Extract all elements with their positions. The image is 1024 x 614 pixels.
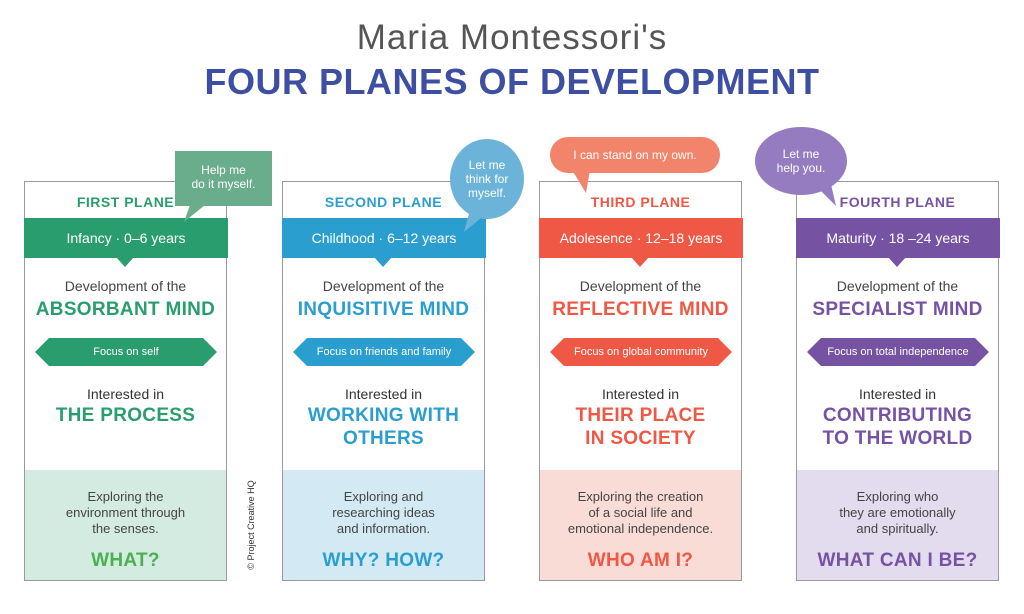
bubble text: fourth: Let me: [783, 147, 819, 161]
bubble text: third: I can stand on my own.: [573, 148, 697, 162]
bubble text: first: Help me: [201, 163, 246, 177]
focus arrow: Focus on self: [93, 346, 159, 358]
bottom box: [797, 470, 998, 580]
bubble: third: [550, 137, 720, 193]
bottom box: [540, 470, 741, 580]
bubble text: second: think for: [466, 172, 508, 186]
interest text: Interested in: [602, 386, 679, 402]
panel: first plane: [24, 181, 227, 581]
interest heading: [822, 405, 972, 449]
bottom box: emotional independence.: [568, 521, 713, 536]
bottom box: and information.: [337, 521, 430, 536]
interest heading: IN SOCIETY: [585, 428, 696, 449]
mind heading: SPECIALIST MIND: [812, 299, 983, 320]
bottom box: Exploring the creation: [578, 489, 703, 504]
interest heading: THEIR PLACE: [576, 405, 705, 426]
mind heading: ABSORBANT MIND: [36, 299, 215, 320]
development text: Development of the: [323, 278, 444, 294]
plane label: FOURTH PLANE: [840, 194, 955, 210]
interest text: Interested in: [345, 386, 422, 402]
focus arrow: [807, 338, 989, 366]
development text: Development of the: [580, 278, 701, 294]
development text: Development of the: [65, 278, 186, 294]
focus arrow: Focus on friends and family: [317, 346, 451, 358]
focus arrow: [550, 338, 732, 366]
speech bubbles: [175, 127, 847, 232]
interest heading: THE PROCESS: [56, 405, 195, 426]
bottom box: [25, 470, 226, 580]
bottom box: the senses.: [92, 521, 159, 536]
bottom box: Exploring and: [344, 489, 423, 504]
bottom box: they are emotionally: [839, 505, 956, 520]
credit: © Project Creative HQ: [246, 480, 256, 570]
panel: fourth plane: [796, 181, 999, 581]
mind heading: INQUISITIVE MIND: [298, 299, 469, 320]
title: FOUR PLANES OF DEVELOPMENT: [204, 61, 820, 102]
bottom box: [283, 470, 484, 580]
bottom box: WHAT CAN I BE?: [817, 550, 978, 571]
mind heading: REFLECTIVE MIND: [552, 299, 729, 320]
panel: third plane: [539, 181, 742, 581]
plane label: FIRST PLANE: [77, 194, 174, 210]
focus arrow: Focus on global community: [574, 346, 708, 358]
bottom box: of a social life and: [588, 505, 693, 520]
bottom box: WHO AM I?: [588, 550, 693, 571]
bottom box: Exploring the: [88, 489, 163, 504]
age band: [24, 218, 228, 258]
bubble: fourth: [755, 127, 847, 206]
bottom box: WHAT?: [91, 550, 160, 571]
age band: Maturity · 18 –24 years: [826, 230, 970, 246]
age band: Childhood · 6–12 years: [312, 230, 456, 246]
age band: [282, 218, 486, 258]
development text: Development of the: [837, 278, 958, 294]
age band: Infancy · 0–6 years: [66, 230, 186, 246]
interest heading: CONTRIBUTING: [823, 405, 972, 426]
interest heading: TO THE WORLD: [823, 428, 972, 449]
bubble text: second: Let me: [469, 158, 505, 172]
bubble: first: [175, 151, 272, 222]
title: Maria Montessori's: [357, 18, 667, 57]
bubble text: fourth: help you.: [777, 161, 825, 175]
interest heading: [308, 405, 459, 449]
panel: second plane: [282, 181, 485, 581]
interest heading: OTHERS: [343, 428, 424, 449]
bubble text: second: myself.: [468, 186, 506, 200]
interest text: Interested in: [859, 386, 936, 402]
bottom box: environment through: [66, 505, 185, 520]
bubble text: fourth: [777, 147, 825, 175]
title: [204, 18, 820, 102]
bubble: second: [450, 139, 524, 232]
interest heading: [576, 405, 705, 449]
focus arrow: [293, 338, 475, 366]
age band: [539, 218, 743, 258]
bottom box: researching ideas: [332, 505, 435, 520]
plane label: THIRD PLANE: [591, 194, 690, 210]
focus arrow: Focus on total independence: [827, 346, 969, 358]
interest heading: WORKING WITH: [308, 405, 459, 426]
focus arrow: [35, 338, 217, 366]
bottom box: WHY? HOW?: [323, 550, 444, 571]
interest text: Interested in: [87, 386, 164, 402]
age band: Adolesence · 12–18 years: [560, 230, 722, 246]
bubble text: first: do it myself.: [191, 177, 256, 191]
bottom box: Exploring who: [857, 489, 938, 504]
bubble text: first: [191, 163, 256, 191]
bubble text: second: [466, 158, 508, 200]
age band: [796, 218, 1000, 258]
plane label: SECOND PLANE: [325, 194, 442, 210]
bottom box: and spiritually.: [856, 521, 939, 536]
